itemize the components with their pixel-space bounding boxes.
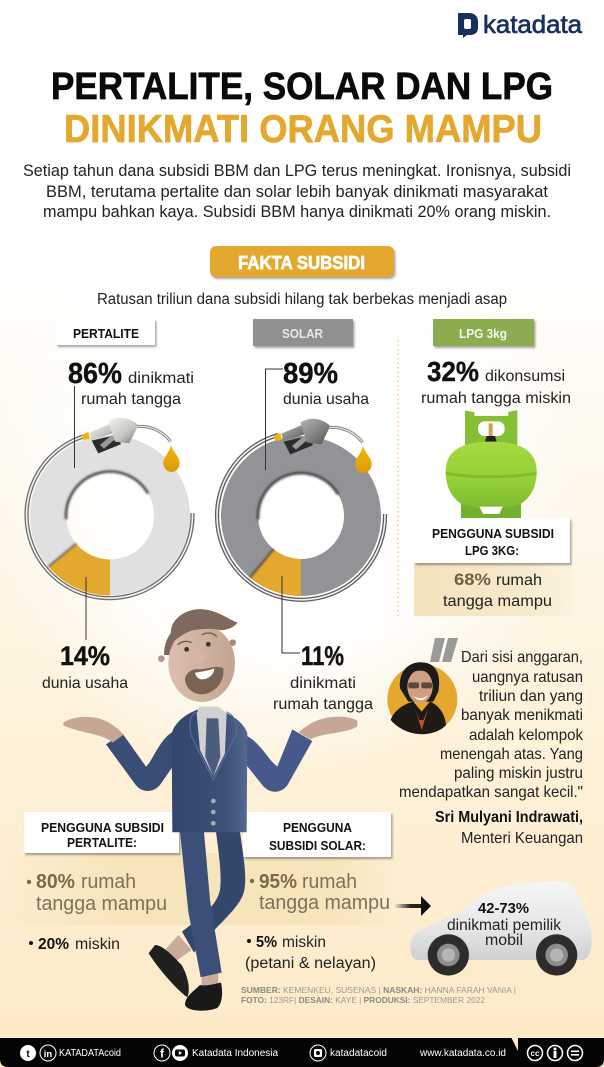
icon: fuel nozzle <box>274 419 372 473</box>
social: katadatacoid: in <box>44 1049 52 1060</box>
quote text: triliun dan yang <box>479 688 583 705</box>
panel: pengguna subsidi solar <box>235 812 395 972</box>
quote <box>387 638 584 847</box>
box heading <box>243 812 391 857</box>
quote text: mendapatkan sangat kecil." <box>399 784 583 801</box>
callout: pengguna subsidi lpg: LPG 3KG: <box>465 544 519 558</box>
stat: 95%: 95% <box>259 871 297 893</box>
stat: 14%: dunia usaha <box>42 675 128 692</box>
callout: pengguna subsidi lpg <box>414 518 572 616</box>
website: www.katadata.co.id <box>419 1048 506 1059</box>
label: solar <box>253 319 353 346</box>
quote text: uangnya ratusan <box>472 669 583 686</box>
social: instagram <box>310 1045 387 1061</box>
stat: 32%: 32% <box>427 356 479 387</box>
stat: 11% <box>273 576 373 713</box>
quote attribution: Menteri Keuangan <box>461 830 583 847</box>
social: instagram: katadatacoid <box>330 1048 387 1059</box>
icon: fuel nozzle <box>82 418 180 472</box>
quote text: banyak menikmati <box>461 707 583 724</box>
stat: 80% <box>27 871 167 915</box>
panel: solar <box>217 319 385 713</box>
divider <box>397 340 399 618</box>
social: katadata indonesia: Katadata Indonesia <box>192 1048 278 1059</box>
title: PERTALITE, SOLAR DAN LPG <box>51 66 553 108</box>
title <box>51 66 553 151</box>
intro text: mampu bahkan kaya. Subsidi BBM hanya dinikmati 20% orang miskin. <box>43 202 551 221</box>
source credits: FOTO: 123RF| DESAIN: KAYE | PRODUKSI: SEPTEMBER 2022 <box>241 995 485 1005</box>
social: katadatacoid: t <box>26 1049 30 1060</box>
heading button: fakta subsidi <box>210 246 394 277</box>
logo: katadata: katadata <box>483 11 582 39</box>
callout: pengguna subsidi lpg: tangga mampu <box>443 593 552 610</box>
label: pertalite: PERTALITE <box>73 327 139 341</box>
stat: 89%: dunia usaha <box>283 391 369 408</box>
donut chart: pertalite <box>27 435 193 598</box>
arrow to car <box>394 896 431 916</box>
box heading: PERTALITE: <box>67 836 137 850</box>
illustration: car with stat <box>410 881 592 976</box>
stat: 14% <box>42 577 128 692</box>
quote attribution: Sri Mulyani Indrawati, <box>435 809 583 826</box>
box heading <box>24 812 179 853</box>
stat: 86% <box>68 358 194 468</box>
stat: 89%: 89% <box>283 358 338 390</box>
social: katadatacoid: KATADATAcoid <box>59 1048 121 1059</box>
illustration: car with stat: 42-73% <box>478 901 529 917</box>
label: lpg 3kg: LPG 3kg <box>459 327 507 341</box>
social: katadatacoid <box>20 1045 121 1061</box>
stat: 86%: rumah tangga <box>81 391 181 408</box>
intro text: Setiap tahun dana subsidi BBM dan LPG terus meningkat. Ironisnya, subsidi <box>23 161 571 180</box>
stat: 86%: dinikmati <box>128 370 194 387</box>
stat: 20% <box>29 936 120 953</box>
panel: lpg 3kg <box>414 319 572 616</box>
stat: 32% <box>421 356 571 407</box>
stat: 5%: miskin <box>282 934 326 951</box>
icon: creative commons: cc <box>531 1049 540 1058</box>
illustration: man shrugging <box>63 609 357 1011</box>
stat: 20%: miskin <box>75 936 120 953</box>
footer bar <box>0 1037 604 1067</box>
stat: 95% <box>250 871 390 914</box>
callout: pengguna subsidi lpg: PENGGUNA SUBSIDI <box>432 527 554 541</box>
heading button: fakta subsidi: FAKTA SUBSIDI <box>238 253 365 273</box>
stat: 5% <box>245 934 376 972</box>
quote text: adalah kelompok <box>469 727 584 744</box>
stat: 32%: dikonsumsi <box>485 368 565 385</box>
subtitle: Ratusan triliun dana subsidi hilang tak berbekas menjadi asap <box>97 291 507 308</box>
stat: 5%: 5% <box>256 934 277 951</box>
social: katadata indonesia: f <box>160 1046 165 1060</box>
label: lpg 3kg <box>433 319 534 346</box>
box heading: PENGGUNA <box>283 821 352 835</box>
callout: pengguna subsidi lpg: 68% <box>454 570 491 589</box>
stat: 80%: rumah <box>81 871 136 893</box>
intro text <box>23 161 571 221</box>
intro text: BBM, terutama pertalite dan solar lebih banyak dinikmati masyarakat <box>46 182 548 201</box>
quote text: menengah atas. Yang <box>440 746 583 763</box>
quote attribution <box>435 809 583 847</box>
stat: 89% <box>266 358 369 470</box>
label: solar: SOLAR <box>282 327 323 341</box>
icon: quotation mark <box>430 638 458 662</box>
quote text: paling miskin justru <box>454 765 583 782</box>
source credits <box>241 985 516 1005</box>
quote text <box>399 649 584 801</box>
stat: 80%: 80% <box>36 871 75 893</box>
stat: 11%: 11% <box>301 641 344 671</box>
stat: 95%: rumah <box>302 871 357 893</box>
quote text: Dari sisi anggaran, <box>461 649 583 666</box>
stat: 86%: 86% <box>68 358 122 390</box>
icon: creative commons <box>528 1046 582 1060</box>
stat: 11%: rumah tangga <box>273 696 373 713</box>
portrait: sri mulyani <box>387 662 457 734</box>
social: katadata indonesia <box>154 1045 278 1061</box>
stat: 32%: rumah tangga miskin <box>421 390 571 407</box>
stat: 20%: 20% <box>38 936 69 953</box>
panel: pertalite <box>27 319 194 692</box>
donut chart: solar <box>217 435 385 600</box>
stat: 95%: tangga mampu <box>259 892 390 914</box>
stat: 5%: (petani & nelayan) <box>245 955 376 972</box>
stat: 80%: tangga mampu <box>36 893 167 915</box>
stat: 11%: dinikmati <box>290 675 356 692</box>
source credits: SUMBER: KEMENKEU, SUSENAS | NASKAH: HANNA FARAH VANIA | <box>241 985 516 995</box>
box heading: PENGGUNA SUBSIDI <box>41 821 164 835</box>
title: DINIKMATI ORANG MAMPU <box>64 108 542 151</box>
illustration: car with stat: mobil <box>485 932 523 949</box>
label: pertalite <box>56 319 155 345</box>
icon: lpg gas cylinder <box>446 410 537 522</box>
box heading: SUBSIDI SOLAR: <box>269 839 366 853</box>
stat: 14%: 14% <box>60 641 110 671</box>
callout: pengguna subsidi lpg: rumah <box>496 572 542 589</box>
panel: pengguna subsidi pertalite <box>0 812 245 953</box>
illustration: car with stat: dinikmati pemilik <box>447 917 561 934</box>
